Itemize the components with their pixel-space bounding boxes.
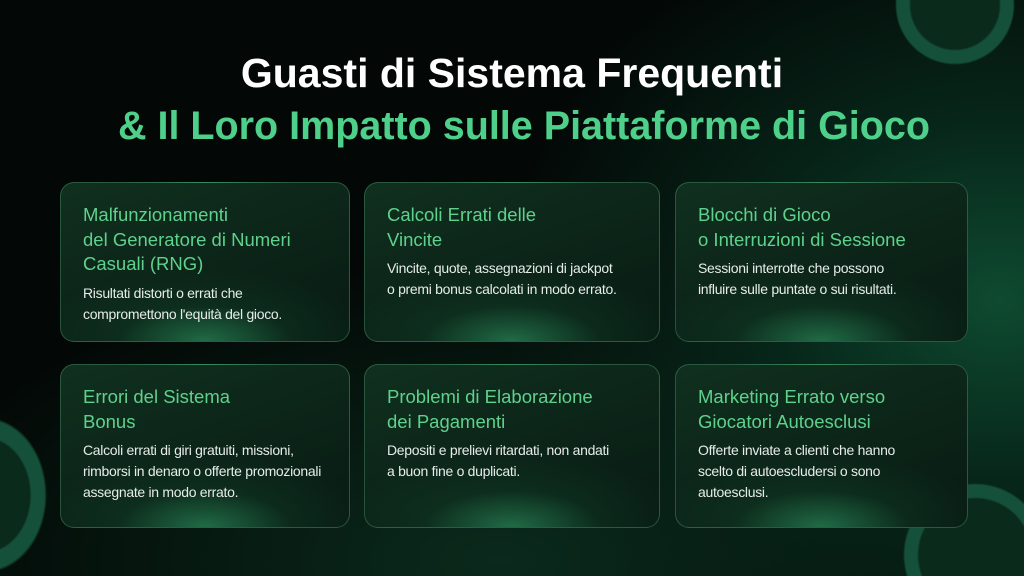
title line 1: Guasti di Sistema Frequenti	[241, 50, 783, 96]
card: RNG: Malfunzionamenti	[83, 204, 228, 225]
card: marketing: scelto di autoescludersi o sono	[698, 463, 880, 479]
card: bonus: assegnate in modo errato.	[83, 484, 238, 500]
card: RNG	[60, 182, 350, 342]
card: bonus: rimborsi in denaro o offerte promozionali	[83, 463, 321, 479]
card: marketing: Marketing Errato verso	[698, 386, 885, 407]
card: RNG: compromettono l'equità del gioco.	[83, 306, 282, 322]
card: pagamenti: Problemi di Elaborazione	[387, 386, 593, 407]
card: vincite: o premi bonus calcolati in modo errato.	[387, 281, 617, 297]
card: marketing: Giocatori Autoesclusi	[698, 410, 871, 432]
card: blocchi: Blocchi di Gioco	[698, 204, 831, 225]
card: blocchi: Sessioni interrotte che possono	[698, 260, 884, 276]
card: pagamenti: dei Pagamenti	[387, 410, 505, 432]
card: bonus: Bonus	[83, 410, 135, 432]
card: bonus: Calcoli errati di giri gratuiti, missioni,	[83, 442, 294, 458]
title line 2: & Il Loro Impatto sulle Piattaforme di Gioco	[118, 104, 930, 148]
card: vincite: Calcoli Errati delle	[387, 204, 536, 225]
card: pagamenti	[364, 364, 660, 528]
card: vincite: Vincite	[387, 228, 442, 250]
card: RNG: del Generatore di Numeri Casuali (RNG)	[83, 228, 291, 274]
card: pagamenti: Depositi e prelievi ritardati, non andati	[387, 442, 609, 458]
card: marketing	[675, 364, 968, 528]
card: vincite	[364, 182, 660, 342]
card: RNG: Risultati distorti o errati che	[83, 284, 243, 300]
card: blocchi: o Interruzioni di Sessione	[698, 228, 906, 250]
card: vincite: Vincite, quote, assegnazioni di jackpot	[387, 260, 612, 276]
card: marketing: autoesclusi.	[698, 484, 768, 500]
card: blocchi	[675, 182, 968, 342]
card: pagamenti: a buon fine o duplicati.	[387, 463, 520, 479]
card: bonus: Errori del Sistema	[83, 386, 230, 407]
card: marketing: Offerte inviate a clienti che hanno	[698, 442, 895, 458]
card: bonus	[60, 364, 350, 528]
card: blocchi: influire sulle puntate o sui risultati.	[698, 281, 896, 297]
